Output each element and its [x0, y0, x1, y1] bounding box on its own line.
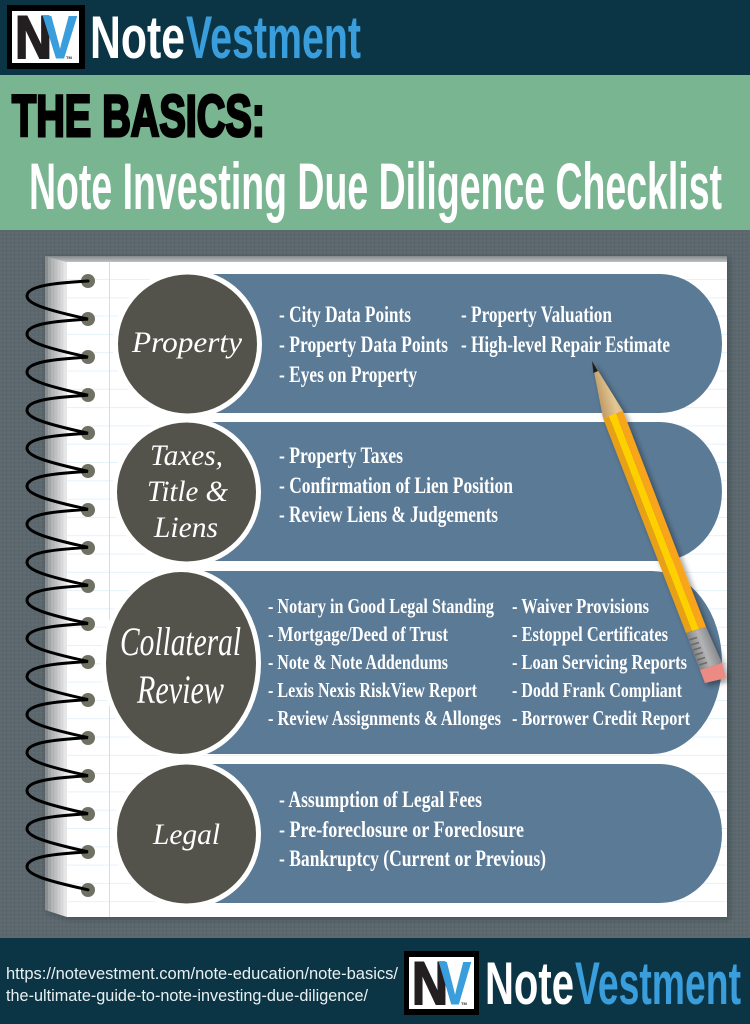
binding holes — [81, 274, 95, 897]
heading: the basics: THE BASICS: — [12, 84, 265, 149]
panel: property — [113, 270, 722, 418]
list: property items: - Eyes on Property — [279, 362, 417, 387]
textured background — [0, 230, 750, 940]
list: collateral items right: - Waiver Provisions — [512, 594, 649, 618]
list: collateral items left: - Note & Note Addendums — [268, 650, 448, 674]
icon: NoteVestment logo: V — [43, 4, 77, 71]
list: collateral items left — [268, 594, 501, 730]
list: legal items: - Bankruptcy (Current or Previous) — [279, 846, 546, 871]
label: taxes, title and liens: Taxes, — [150, 439, 223, 472]
spiral binding — [27, 274, 95, 897]
icon: footer logo: V — [439, 950, 471, 1017]
label: collateral review: Review — [136, 667, 224, 712]
list: collateral items right — [512, 594, 691, 730]
list: legal items — [279, 787, 546, 871]
footer bar — [0, 938, 750, 1024]
list: collateral items right: - Loan Servicing Reports — [512, 650, 687, 674]
list: collateral items right: - Estoppel Certificates — [512, 622, 668, 646]
list: collateral items left: - Mortgage/Deed of Trust — [268, 622, 449, 646]
panel: legal — [112, 760, 722, 908]
list: collateral items right: - Borrower Credit Report — [512, 706, 691, 730]
source link: the-ultimate-guide-to-note-investing-due-diligence/ — [6, 986, 368, 1005]
brand wordmark blue part: Vestment — [186, 4, 361, 71]
label: collateral review — [120, 619, 241, 712]
list: legal items: - Pre-foreclosure or Foreclosure — [279, 817, 524, 842]
list: property items: - Property Valuation — [461, 302, 612, 327]
panel: taxes, title and liens — [112, 418, 722, 566]
list: property items: - High-level Repair Estimate — [461, 332, 670, 357]
icon: footer logo — [404, 950, 479, 1017]
icon: NoteVestment logo: N — [15, 4, 52, 71]
title band — [0, 75, 750, 230]
icon: footer logo: N — [412, 950, 448, 1017]
list: collateral items right: - Dodd Frank Compliant — [512, 678, 683, 702]
label: property: Property — [131, 326, 243, 359]
list: taxes items: - Confirmation of Lien Position — [279, 473, 513, 498]
brand wordmark: Note — [90, 4, 185, 71]
icon: pencil — [592, 361, 726, 683]
list: collateral items left: - Review Assignments & Allonges — [268, 706, 501, 730]
label: collateral review: Collateral — [120, 619, 241, 664]
notebook — [45, 256, 727, 917]
header bar — [0, 0, 750, 75]
source link: https://notevestment.com/note-education/note-basics/ — [6, 964, 398, 983]
coil wire — [27, 281, 88, 890]
list: legal items: - Assumption of Legal Fees — [279, 787, 482, 812]
list: collateral items left: - Notary in Good Legal Standing — [268, 594, 494, 618]
list: taxes items: - Review Liens & Judgements — [279, 502, 498, 527]
list: property items: - City Data Points — [279, 302, 411, 327]
label: taxes, title and liens: Title & — [147, 475, 229, 508]
list: taxes items: - Property Taxes — [279, 443, 403, 468]
icon: NoteVestment logo — [7, 4, 85, 71]
icon: footer logo: TM — [461, 1001, 467, 1006]
source link — [6, 964, 398, 1005]
icon: NoteVestment logo: TM — [66, 55, 72, 60]
list: taxes items — [279, 443, 513, 527]
list: property items — [279, 302, 670, 387]
label: taxes, title and liens: Liens — [153, 511, 218, 544]
panel: collateral review — [101, 567, 722, 759]
label: taxes, title and liens — [147, 439, 229, 544]
footer wordmark: Note — [485, 950, 574, 1017]
label: legal: Legal — [152, 818, 220, 851]
list: property items: - Property Data Points — [279, 332, 448, 357]
list: collateral items left: - Lexis Nexis RiskView Report — [268, 678, 478, 702]
